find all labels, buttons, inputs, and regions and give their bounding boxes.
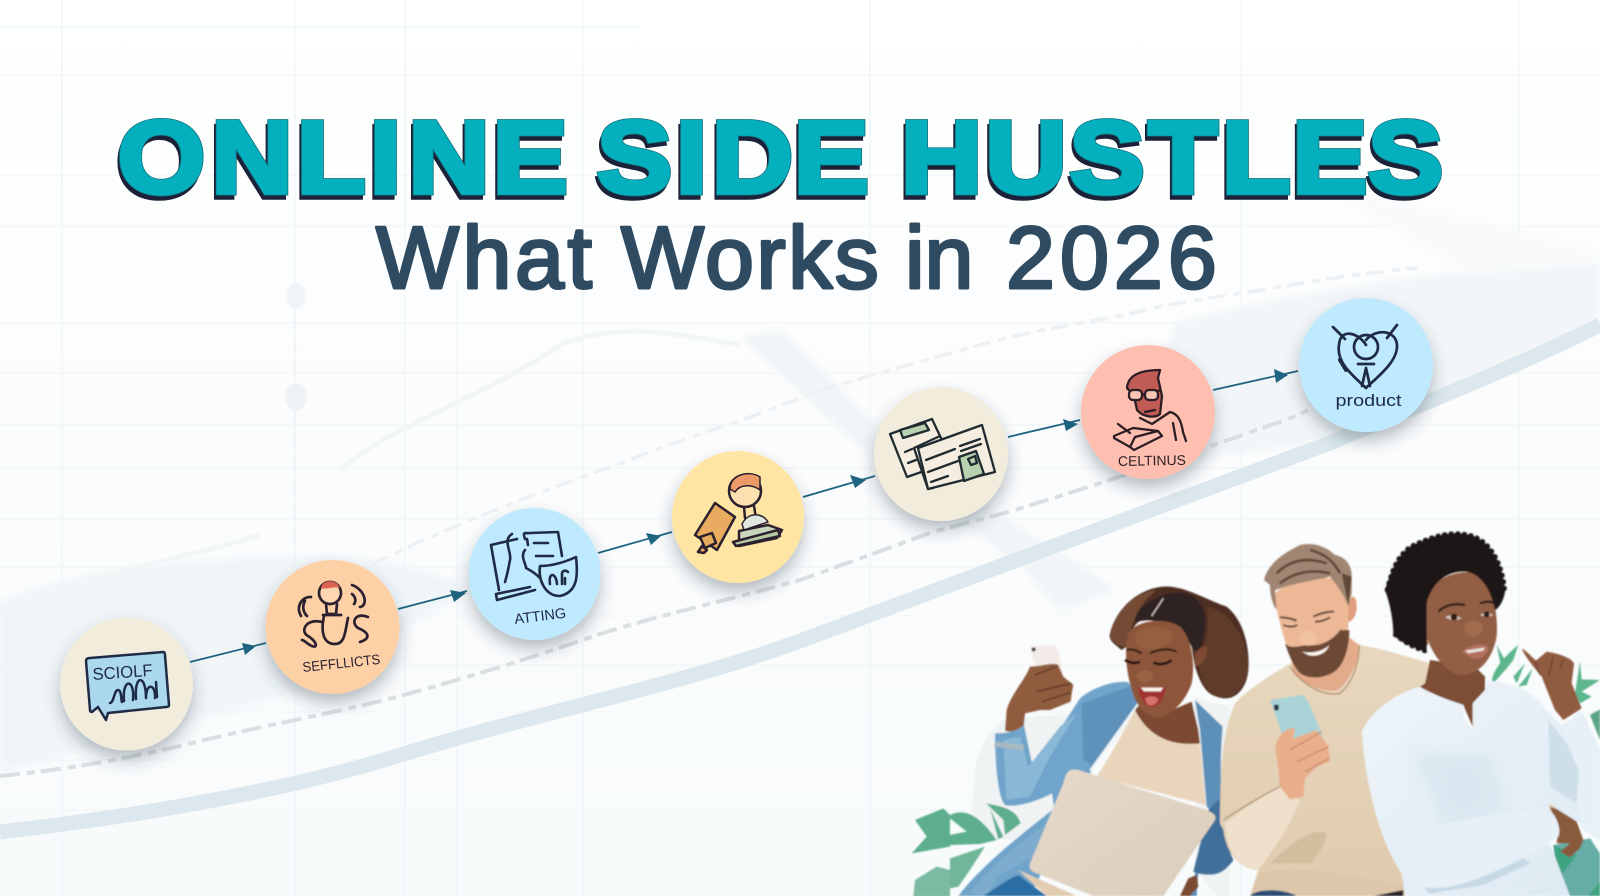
- title: Online Side Hustles: ONLINE SIDE HUSTLES: [118, 100, 1443, 214]
- woman with phone and laptop: [912, 587, 1249, 896]
- step 5: documents badge: [874, 387, 1008, 521]
- hand: [1275, 728, 1330, 799]
- face: [1126, 621, 1193, 717]
- icon: figure with swirls: [299, 581, 368, 647]
- step 7: product badge: [1299, 298, 1433, 432]
- plant left: [912, 803, 1021, 896]
- neck: [1292, 637, 1359, 691]
- hand: [1005, 664, 1073, 732]
- arm: [1225, 787, 1300, 870]
- arrow: step 5 to 6: [1008, 419, 1080, 437]
- label: CELTINUS: CELTINUS: [1118, 452, 1186, 469]
- arrow: step 4 to 5: [803, 475, 875, 497]
- plant right: [1492, 645, 1600, 896]
- icon: bearded man with book: [1114, 370, 1186, 450]
- subtitle: What Works in 2026: What: [376, 208, 595, 307]
- man with phone: [1220, 544, 1440, 896]
- label: ATTING: ATTING: [514, 606, 567, 628]
- icon: person with clipboard: [695, 474, 782, 553]
- title: Online Side Hustles: ONLINE SIDE HUSTLES: [118, 100, 1443, 214]
- step 2: figure badge: [266, 560, 400, 694]
- woman in white blouse: [1362, 533, 1600, 896]
- curly hair: [1385, 533, 1505, 652]
- subtitle: What Works in 2026: Works: [621, 208, 881, 307]
- blouse: [1362, 680, 1600, 896]
- shirt: [1097, 710, 1206, 805]
- label: SCIOLF: SCIOLF: [92, 661, 153, 684]
- hair: [1110, 587, 1249, 698]
- phone: [1030, 645, 1065, 680]
- step 3: profile badge: [468, 508, 600, 640]
- laptop: [1030, 769, 1215, 896]
- step 4: person and clipboard badge: [672, 451, 804, 583]
- arrow: step 1 to 2: [190, 643, 266, 662]
- white seat: [970, 697, 1230, 896]
- subtitle: What Works in 2026: in: [905, 208, 974, 307]
- icon: laptop profile and shield: [491, 532, 577, 600]
- arrow: step 2 to 3: [398, 590, 467, 609]
- arm skin behind: [1547, 797, 1563, 813]
- subtitle: What Works in 2026: 2026: [1006, 208, 1222, 307]
- crossed forearm: [1422, 808, 1559, 890]
- face: [1275, 577, 1349, 677]
- neck: [1135, 702, 1200, 744]
- icon: overlapping documents: [890, 419, 995, 489]
- face: [1425, 572, 1497, 675]
- step 1: chat chart badge: [60, 618, 193, 750]
- jacket: [958, 682, 1142, 896]
- sweater: [1220, 645, 1440, 896]
- hair: [1264, 544, 1352, 610]
- label: product: product: [1336, 391, 1402, 410]
- title: Online Side Hustles: ONLINE SIDE HUSTLES: [116, 105, 1441, 219]
- icon: speech bubble with bars: [86, 652, 169, 720]
- phone: [1270, 695, 1325, 762]
- people photo group: [912, 533, 1600, 896]
- label: SEFFLLICTS: SEFFLLICTS: [302, 651, 381, 675]
- raised hand: [1522, 648, 1582, 720]
- icon: heart pin: [1333, 325, 1397, 388]
- arrow: step 3 to 4: [598, 532, 672, 553]
- arrow: step 6 to 7: [1213, 369, 1298, 390]
- step 6: bearded writer badge: [1081, 345, 1215, 479]
- neck: [1420, 660, 1485, 728]
